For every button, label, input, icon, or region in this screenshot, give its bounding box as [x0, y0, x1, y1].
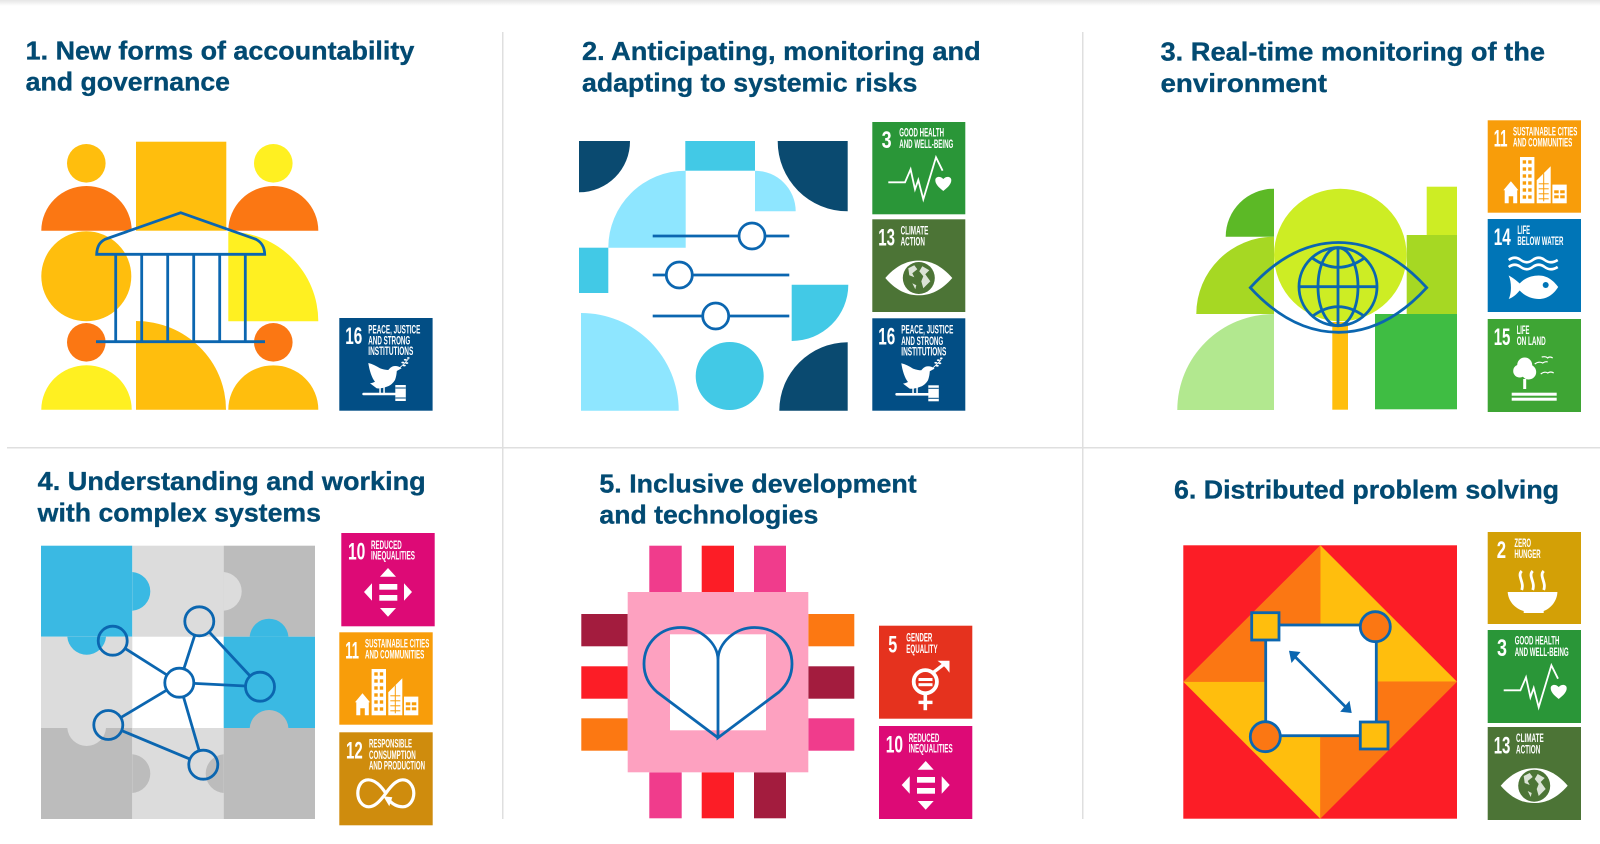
title 2: 2. Anticipating, monitoring and — [582, 36, 981, 66]
SDG tile 12 — [339, 732, 433, 825]
SDG tile 11: 11 — [345, 637, 359, 664]
panel 6: distributed problem solving — [1174, 474, 1581, 820]
icon: network — [94, 607, 274, 779]
SDG tile 15: 15 — [1494, 324, 1510, 351]
SDG tile 13: CLIMATE — [1516, 733, 1544, 745]
SDG tile 10 — [879, 726, 972, 819]
SDG tile 10: 10 — [348, 538, 365, 566]
SDG tile 10: INEQUALITIES — [909, 744, 953, 756]
SDG tile 12: AND PRODUCTION — [369, 761, 425, 773]
title 6: 6. Distributed problem solving — [1174, 474, 1559, 504]
SDG tile 11 — [1488, 120, 1581, 213]
title 3: 3. Real-time monitoring of the — [1160, 37, 1545, 67]
SDG tile 16: 16 — [345, 323, 362, 350]
title 4: with complex systems — [37, 498, 321, 528]
SDG tile 10 — [341, 533, 435, 626]
title 1: and governance — [26, 67, 230, 97]
SDG tile 13: 13 — [1494, 732, 1510, 759]
SDG tile 13 — [872, 219, 965, 312]
title 3 — [1160, 37, 1545, 98]
illustration: puzzle and network — [41, 546, 315, 819]
panel 2: systemic risks — [579, 36, 981, 411]
SDG tile 16: AND STRONG — [368, 336, 410, 348]
SDG tile 15: LIFE — [1517, 325, 1530, 337]
title 2 — [582, 36, 981, 97]
SDG tile 10: INEQUALITIES — [371, 551, 415, 563]
SDG tile 3: 3 — [1497, 635, 1507, 662]
SDG tile 11 — [339, 632, 433, 725]
title 1: 1. New forms of accountability — [26, 35, 415, 65]
panel 1: accountability and governance — [26, 35, 433, 411]
panel 5: inclusive technologies — [581, 468, 972, 819]
SDG tile 3 — [1488, 630, 1581, 723]
SDG tile 2: HUNGER — [1514, 549, 1541, 561]
SDG tile 5: GENDER — [906, 633, 933, 645]
SDG tile 13 — [1488, 727, 1581, 820]
SDG tile 11: 11 — [1494, 125, 1507, 152]
SDG tile 16: PEACE, JUSTICE — [368, 324, 420, 336]
title 2: adapting to systemic risks — [582, 67, 917, 97]
SDG tile 16: 16 — [878, 323, 895, 350]
SDG tile 13: CLIMATE — [901, 225, 928, 237]
SDG tile 3: GOOD HEALTH — [1515, 636, 1559, 648]
illustration: sliders on blue shapes — [579, 141, 848, 411]
SDG tile 5: EQUALITY — [906, 644, 938, 656]
SDG tile 16: AND STRONG — [901, 336, 943, 348]
SDG tile 3: AND WELL-BEING — [899, 139, 953, 151]
SDG tile 3: GOOD HEALTH — [899, 128, 944, 140]
SDG tile 12: RESPONSIBLE — [369, 739, 412, 751]
title 5: and technologies — [599, 499, 818, 529]
SDG tile 14: LIFE — [1517, 225, 1530, 237]
SDG tile 16 — [339, 318, 433, 411]
illustration: chip with heart — [581, 546, 854, 818]
title 5: 5. Inclusive development — [599, 468, 917, 498]
SDG tile 3 — [872, 122, 965, 214]
SDG tile 11: SUSTAINABLE CITIES — [365, 638, 429, 650]
SDG tile 10: REDUCED — [371, 540, 402, 552]
SDG tile 2: ZERO — [1514, 538, 1531, 550]
SDG tile 14: 14 — [1494, 224, 1511, 251]
SDG tile 15 — [1488, 319, 1581, 412]
SDG tile 13: ACTION — [901, 237, 925, 249]
SDG tile 11: AND COMMUNITIES — [365, 649, 424, 661]
SDG tile 2 — [1488, 532, 1581, 624]
SDG tile 16: PEACE, JUSTICE — [901, 325, 953, 337]
SDG tile 10: REDUCED — [909, 733, 939, 745]
SDG tile 16 — [872, 318, 965, 411]
panel 3: environment monitoring — [1160, 37, 1581, 412]
illustration: diamond with resize frame — [1183, 545, 1457, 819]
icon: resize frame — [1250, 612, 1390, 752]
title 5 — [599, 468, 917, 529]
icon: eye with globe — [1250, 242, 1427, 332]
icon: sliders — [653, 223, 789, 329]
SDG tile 2: 2 — [1497, 537, 1506, 564]
SDG tile 13: ACTION — [1516, 744, 1540, 756]
illustration: people and institution — [41, 142, 318, 410]
SDG tile 16: INSTITUTIONS — [901, 346, 946, 358]
illustration: eye, globe and green tree shapes — [1177, 187, 1457, 410]
title 4: 4. Understanding and working — [38, 466, 426, 496]
SDG tile 15: ON LAND — [1517, 336, 1546, 348]
SDG tile 5: 5 — [888, 632, 897, 659]
SDG tile 14 — [1488, 219, 1581, 312]
SDG tile 10: 10 — [886, 732, 903, 758]
icon: temple — [96, 213, 265, 342]
SDG tile 5 — [879, 626, 972, 719]
title 1 — [26, 35, 415, 97]
SDG tile 16: INSTITUTIONS — [368, 346, 413, 358]
SDG tile 12: 12 — [346, 737, 363, 764]
title 4 — [37, 466, 426, 528]
title 3: environment — [1160, 68, 1327, 98]
SDG tile 13: 13 — [878, 225, 895, 252]
icon: heart — [644, 628, 792, 738]
panel 4: complex systems — [37, 466, 435, 825]
SDG tile 3: 3 — [882, 127, 892, 154]
SDG tile 12: CONSUMPTION — [369, 750, 416, 762]
